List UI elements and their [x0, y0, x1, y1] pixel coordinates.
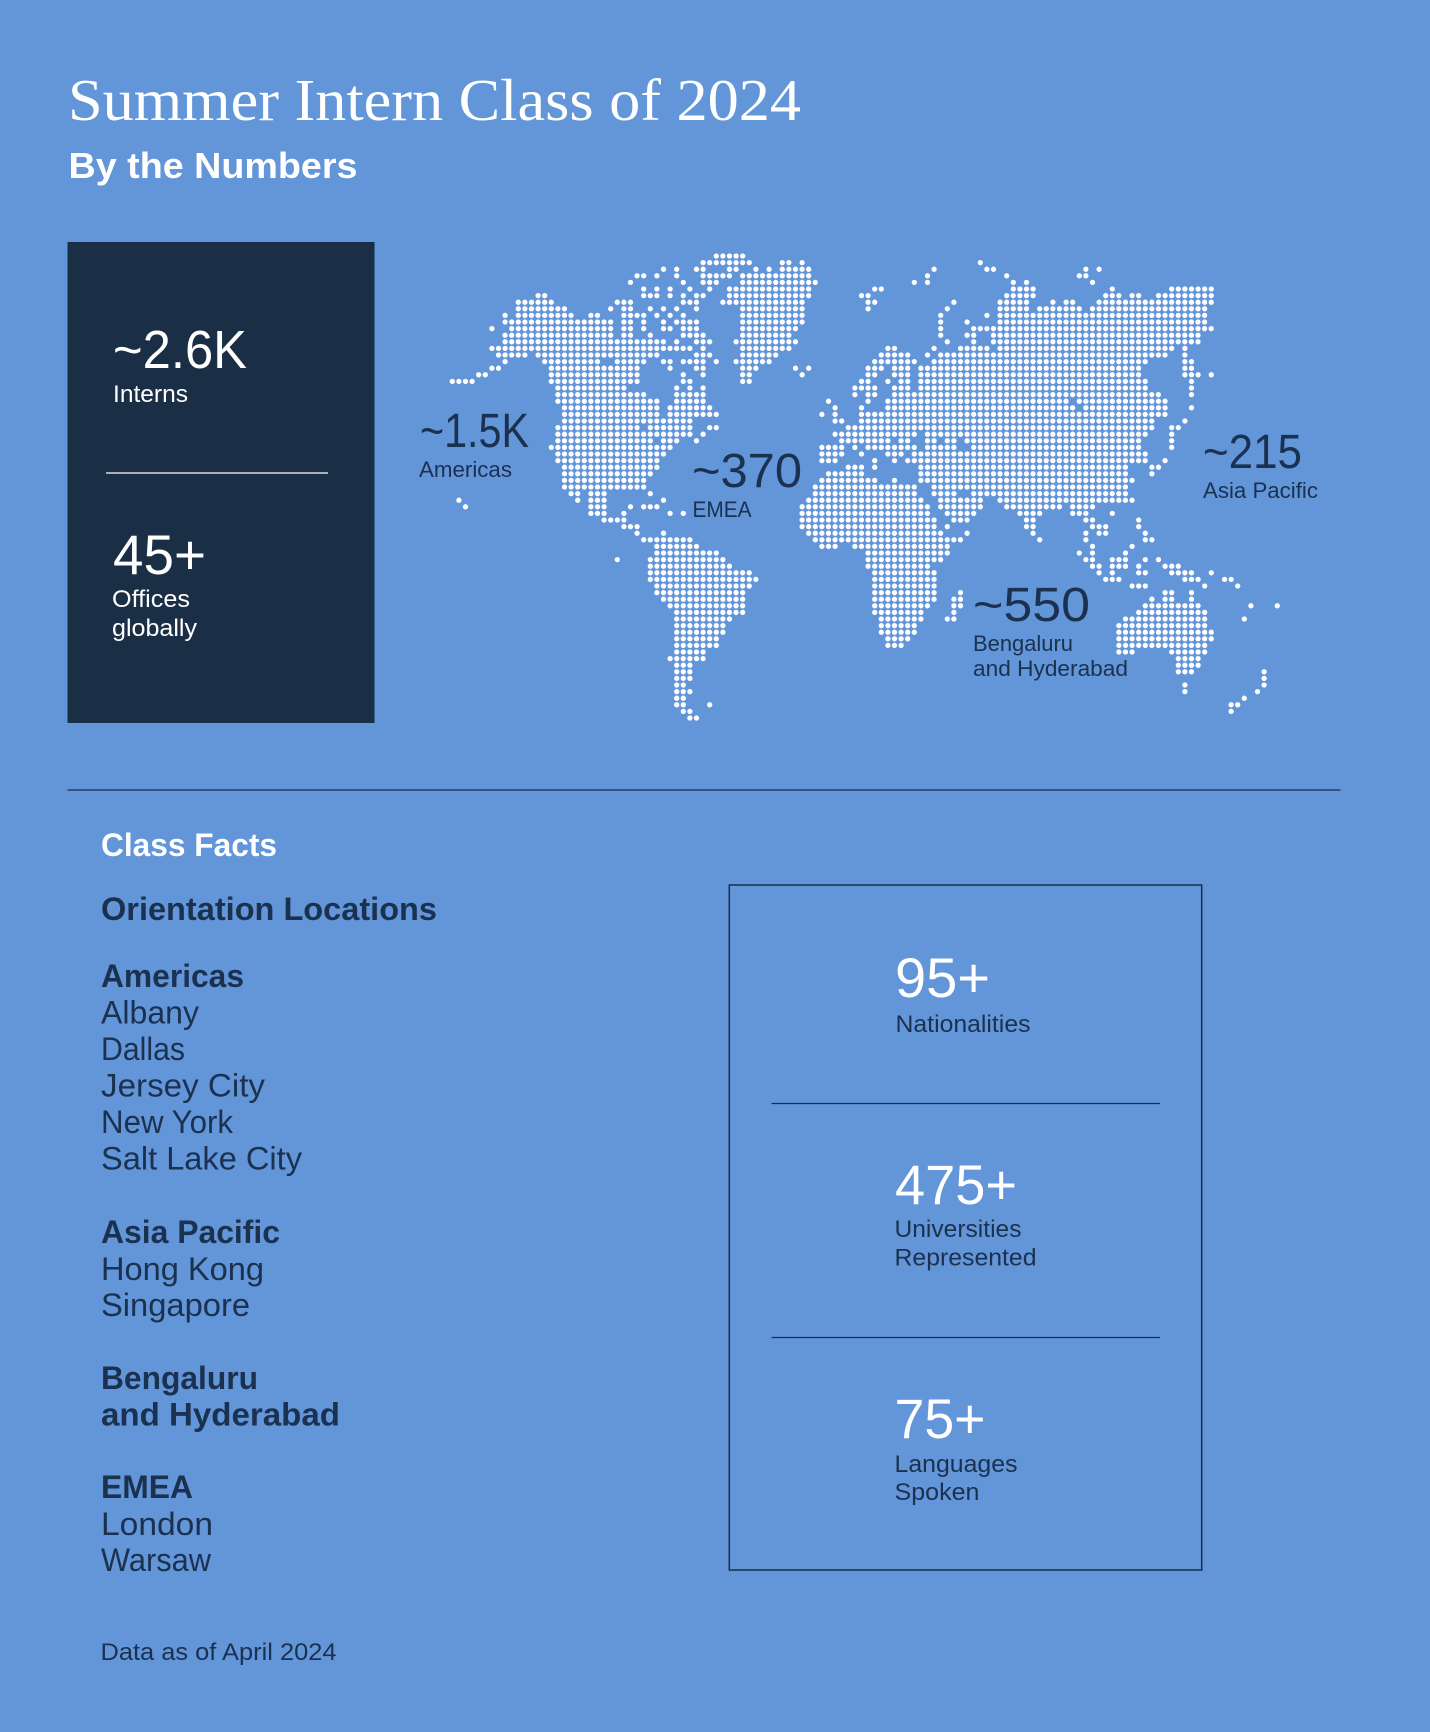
stat: languages: Spoken — [894, 1479, 980, 1506]
list: Asia Pacific — [101, 1214, 280, 1323]
label: Asia Pacific — [1203, 426, 1318, 503]
stat: languages: 75+ — [894, 1387, 986, 1450]
panel: global totals — [68, 242, 374, 723]
stat: languages: Languages — [894, 1451, 1018, 1478]
stat: offices — [112, 523, 206, 642]
list: Americas — [101, 958, 302, 1176]
list: Asia Pacific: Hong Kong — [101, 1251, 264, 1287]
list: Americas: Dallas — [101, 1031, 185, 1067]
list: Bengaluru and Hyderabad: and Hyderabad — [101, 1396, 340, 1432]
list: Asia Pacific: Asia Pacific — [101, 1214, 280, 1250]
list: Bengaluru and Hyderabad: Bengaluru — [101, 1360, 258, 1396]
label: EMEA — [692, 445, 802, 522]
label: Bengaluru and Hyderabad: ~550 — [973, 579, 1090, 632]
list: EMEA: EMEA — [101, 1469, 193, 1505]
stat: offices: 45+ — [113, 523, 206, 586]
list: EMEA — [101, 1469, 213, 1578]
subtitle: By the Numbers — [68, 145, 358, 186]
list: Americas: Americas — [101, 958, 244, 994]
footnote: Data as of April 2024 — [100, 1639, 336, 1666]
label: EMEA: EMEA — [692, 497, 752, 522]
label: Bengaluru and Hyderabad — [973, 579, 1128, 681]
stat: nationalities: Nationalities — [896, 1011, 1030, 1038]
heading: class facts: Class Facts — [101, 827, 277, 863]
stat: interns — [113, 320, 247, 408]
list: Americas: New York — [101, 1104, 234, 1140]
stat: universities: 475+ — [895, 1153, 1017, 1216]
list: Americas: Salt Lake City — [101, 1140, 302, 1176]
label: EMEA: ~370 — [692, 445, 802, 498]
stat: interns: Interns — [113, 381, 188, 408]
dotted world map — [452, 256, 1277, 718]
stat: universities — [894, 1153, 1036, 1272]
stat: universities: Represented — [894, 1244, 1036, 1272]
list: EMEA: London — [101, 1506, 213, 1542]
list: Asia Pacific: Singapore — [101, 1287, 250, 1323]
label: Americas — [419, 405, 529, 482]
stat: universities: Universities — [894, 1216, 1022, 1243]
heading: orientation locations: Orientation Locations — [101, 891, 437, 927]
panel: class stats — [729, 885, 1202, 1570]
stat: nationalities — [895, 946, 1030, 1038]
list: EMEA: Warsaw — [101, 1542, 212, 1578]
list: Americas: Albany — [101, 994, 199, 1030]
stat: interns: ~2.6K — [113, 320, 247, 380]
stat: languages — [894, 1387, 1018, 1506]
stat: offices: globally — [112, 615, 198, 642]
label: Bengaluru and Hyderabad: Bengaluru — [973, 631, 1073, 656]
title: Summer Intern Class of 2024 — [68, 67, 801, 133]
stat: offices: Offices — [112, 586, 190, 613]
label: Bengaluru and Hyderabad: and Hyderabad — [973, 656, 1128, 681]
label: Americas: Americas — [419, 457, 512, 482]
label: Americas: ~1.5K — [420, 405, 529, 458]
list: Americas: Jersey City — [101, 1068, 265, 1104]
list: Bengaluru and Hyderabad — [101, 1360, 340, 1432]
label: Asia Pacific: Asia Pacific — [1203, 478, 1318, 503]
stat: nationalities: 95+ — [895, 946, 990, 1009]
label: Asia Pacific: ~215 — [1203, 426, 1302, 479]
